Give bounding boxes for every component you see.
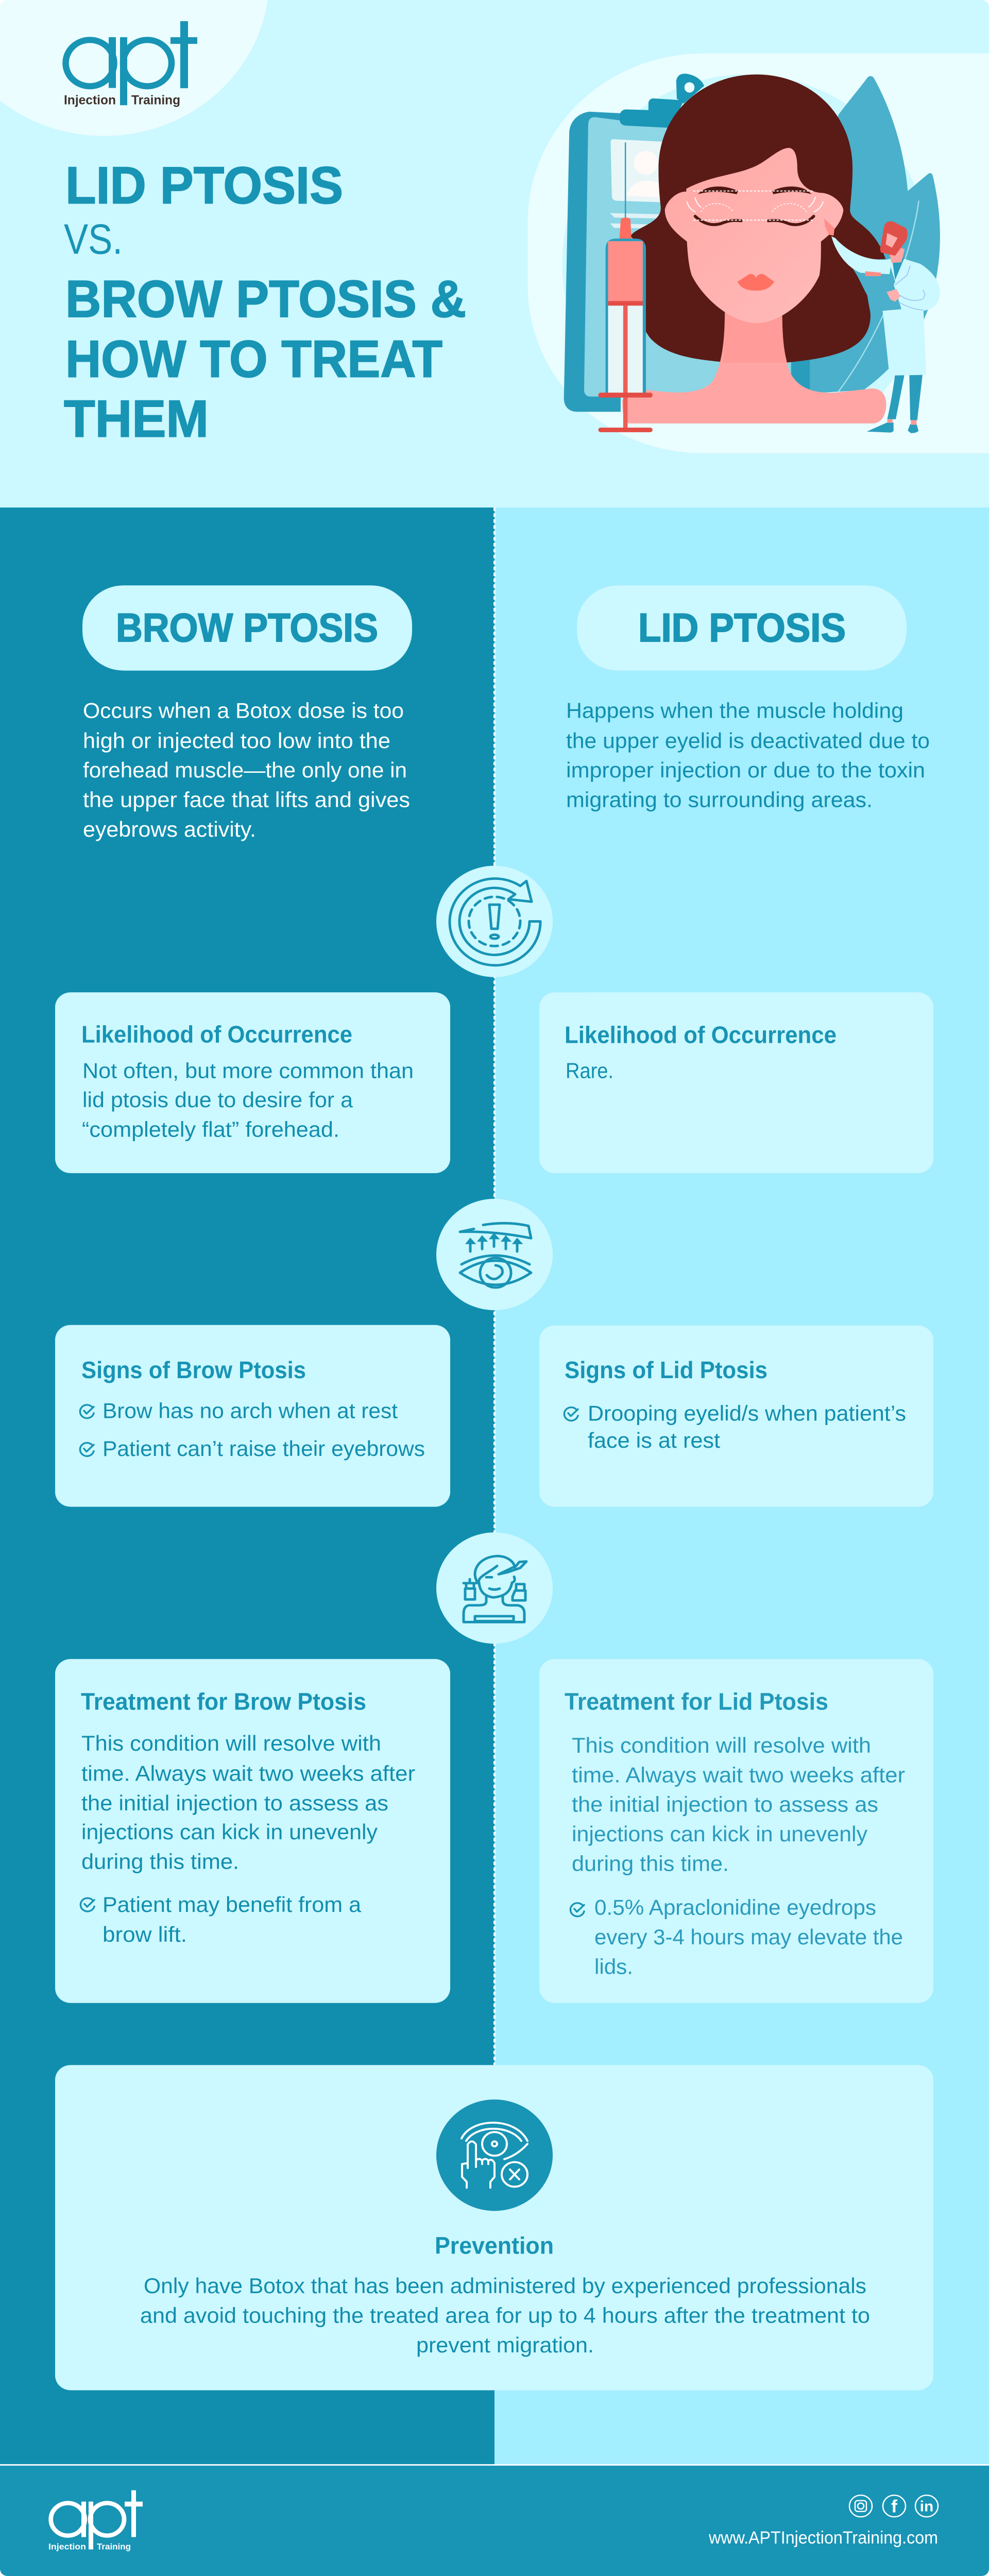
- corner circle behind logo: [0, 0, 269, 136]
- card: signs of lid ptosis: [539, 1326, 933, 1507]
- card: signs of lid ptosis: Signs of Lid Ptosis: [565, 1357, 768, 1383]
- icon: facebook: f: [891, 2497, 897, 2516]
- card: likelihood brow ptosis: “completely flat” forehead.: [82, 1117, 339, 1142]
- card: treatment for brow ptosis: This condition will resolve with: [81, 1732, 381, 1756]
- pill heading: lid ptosis: LID PTOSIS: [638, 605, 846, 650]
- card: treatment for lid ptosis: lids.: [594, 1955, 633, 1979]
- icon: eye, touching hand and cross: [436, 2099, 553, 2211]
- pill heading: lid ptosis: [577, 585, 907, 671]
- text: brow ptosis description: [83, 699, 410, 842]
- card: likelihood brow ptosis: Not often, but more common than: [82, 1059, 414, 1083]
- card: signs of lid ptosis: face is at rest: [588, 1429, 720, 1453]
- panel: prevention: prevent migration.: [416, 2333, 594, 2358]
- card: likelihood lid ptosis: [539, 992, 933, 1173]
- pill heading: brow ptosis: [82, 585, 412, 671]
- card: treatment for brow ptosis: the initial injection to assess as: [81, 1791, 388, 1816]
- pill heading: brow ptosis: BROW PTOSIS: [116, 605, 378, 650]
- title: THEM: [64, 389, 209, 448]
- card: treatment for brow ptosis: Patient may benefit from a: [103, 1893, 361, 1917]
- icon: alert with circular arrow: [436, 866, 553, 977]
- text: brow ptosis description: Occurs when a Botox dose is too: [83, 699, 404, 723]
- card: treatment for brow ptosis: Treatment for Brow Ptosis: [81, 1688, 366, 1715]
- title: HOW TO TREAT: [65, 330, 442, 388]
- panel: prevention: Prevention: [435, 2232, 554, 2259]
- text: lid ptosis description: migrating to surrounding areas.: [566, 788, 873, 812]
- website url: www.APTInjectionTraining.com: [708, 2528, 938, 2548]
- text: lid ptosis description: the upper eyelid is deactivated due to: [566, 729, 930, 753]
- footer logo: Injection: [48, 2542, 86, 2551]
- text: lid ptosis description: improper injection or due to the toxin: [566, 758, 925, 783]
- title: LID PTOSIS: [65, 156, 343, 214]
- card: treatment for brow ptosis: brow lift.: [103, 1923, 187, 1947]
- logo: apt Injection Training: Injection: [64, 93, 116, 108]
- card: likelihood lid ptosis: Likelihood of Occurrence: [565, 1022, 837, 1048]
- illustration: woman, syringe, clipboard and doctor: [527, 54, 989, 453]
- logo: apt Injection Training: [64, 21, 197, 108]
- card: likelihood brow ptosis: Likelihood of Occurrence: [81, 1021, 352, 1047]
- card: treatment for lid ptosis: Treatment for Lid Ptosis: [565, 1688, 828, 1715]
- card: signs of brow ptosis: Brow has no arch when at rest: [103, 1399, 398, 1423]
- card: treatment for lid ptosis: This condition will resolve with: [572, 1734, 871, 1758]
- panel: left column brow ptosis: [0, 507, 494, 2464]
- title: BROW PTOSIS &: [65, 269, 466, 328]
- icon: raised eyebrow and eye: [436, 1199, 553, 1310]
- text: lid ptosis description: Happens when the muscle holding: [566, 699, 903, 723]
- title: VS.: [64, 215, 123, 263]
- text: brow ptosis description: eyebrows activity.: [83, 818, 256, 842]
- icon: facebook: [883, 2495, 906, 2517]
- card: signs of brow ptosis: Patient can’t raise their eyebrows: [103, 1437, 425, 1461]
- card: treatment for lid ptosis: every 3-4 hours may elevate the: [594, 1925, 903, 1950]
- panel: prevention: [55, 2065, 933, 2390]
- card: likelihood brow ptosis: lid ptosis due to desire for a: [82, 1088, 353, 1112]
- footer logo: Training: [97, 2542, 131, 2551]
- text: brow ptosis description: the upper face that lifts and gives: [83, 788, 410, 812]
- text: brow ptosis description: high or injected too low into the: [83, 729, 390, 753]
- icon: check: [570, 1903, 584, 1917]
- icon: check: [80, 1443, 94, 1456]
- card: signs of lid ptosis: Drooping eyelid/s when patient’s: [588, 1401, 906, 1426]
- card: treatment for lid ptosis: injections can kick in unevenly: [572, 1822, 867, 1846]
- footer logo: [48, 2490, 143, 2551]
- icon: check: [80, 1405, 94, 1418]
- icon: check: [564, 1408, 578, 1420]
- social icons: [849, 2495, 938, 2517]
- icon: instagram: [849, 2495, 872, 2517]
- card: treatment for lid ptosis: [539, 1659, 933, 2003]
- text: brow ptosis description: forehead muscle—the only one in: [83, 758, 407, 783]
- text: lid ptosis description: [566, 699, 930, 812]
- card: treatment for brow ptosis: [55, 1659, 450, 2003]
- card: likelihood brow ptosis: [55, 992, 450, 1173]
- card: treatment for lid ptosis: 0.5% Apraclonidine eyedrops: [594, 1895, 876, 1920]
- title: [64, 156, 466, 448]
- icon: check: [80, 1898, 94, 1911]
- card: likelihood lid ptosis: Rare.: [566, 1059, 613, 1083]
- card: signs of brow ptosis: Signs of Brow Ptosis: [81, 1357, 306, 1383]
- card: treatment for brow ptosis: injections can kick in unevenly: [81, 1820, 378, 1844]
- card: treatment for brow ptosis: during this time.: [81, 1850, 239, 1874]
- panel: header background: [0, 0, 989, 507]
- footer background: [0, 2466, 989, 2576]
- card: treatment for lid ptosis: during this time.: [572, 1852, 729, 1876]
- card: treatment for brow ptosis: time. Always wait two weeks after: [81, 1761, 415, 1786]
- icon: woman with syringe and bottles: [436, 1532, 553, 1644]
- panel: prevention: Only have Botox that has been administered by experienced professionals: [144, 2274, 866, 2298]
- panel: right column lid ptosis: [494, 507, 989, 2464]
- icon: linkedin: in: [920, 2498, 933, 2515]
- card: signs of brow ptosis: [55, 1325, 450, 1507]
- panel: prevention: and avoid touching the treated area for up to 4 hours after the treatment to: [140, 2303, 870, 2328]
- logo: apt Injection Training: Training: [131, 93, 180, 108]
- icon: linkedin: [915, 2495, 938, 2517]
- card: treatment for lid ptosis: the initial injection to assess as: [572, 1792, 878, 1817]
- card: treatment for lid ptosis: time. Always wait two weeks after: [572, 1763, 905, 1787]
